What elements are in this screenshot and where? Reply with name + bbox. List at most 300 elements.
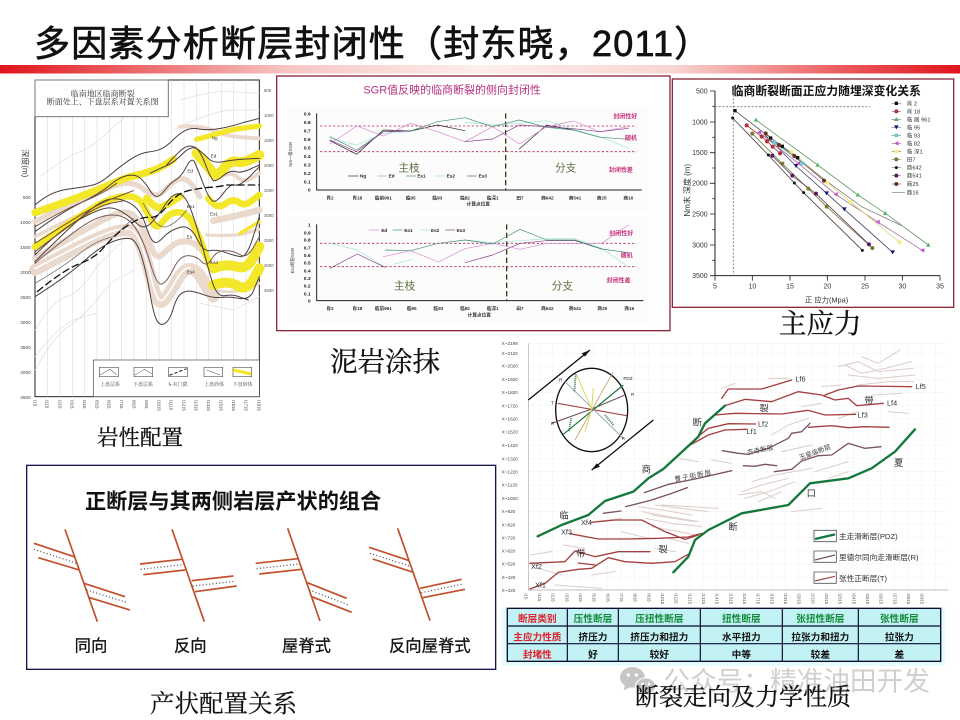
map x axis labels: I1315 xyxy=(701,593,706,605)
table stress row: 水平扭力 xyxy=(722,631,761,643)
left depth axis: 500 xyxy=(23,195,31,200)
lower line chart: 商642 xyxy=(541,305,554,312)
fault zone labels: 断 xyxy=(693,417,702,428)
lower line chart: 0.3 xyxy=(304,276,311,282)
upper line chart: 0.9 xyxy=(304,112,311,118)
fault zone labels: 裂 xyxy=(658,543,668,554)
diagram: roof ridge xyxy=(256,528,352,621)
white streaks inside tan bands xyxy=(35,229,190,300)
table: fault type properties xyxy=(502,607,945,697)
stratum labels: Es4 xyxy=(210,260,218,265)
upper line chart: 肖18 xyxy=(352,194,363,201)
map x axis labels: I115 xyxy=(537,593,542,602)
lower line chart: Es1 xyxy=(404,228,413,233)
fault horizon lines xyxy=(35,118,259,324)
stratum labels: Es4 xyxy=(187,269,195,274)
bottom axis labels: I1315 xyxy=(194,400,199,411)
upper line chart: 随机 xyxy=(625,134,637,142)
lower line chart: 0 xyxy=(308,299,311,305)
stratum labels: Ed xyxy=(211,153,217,158)
table column headers: 扭性断层 xyxy=(722,613,761,625)
right depth axis: 4000 xyxy=(264,263,274,268)
stratum labels: Es1 xyxy=(187,204,195,209)
lower line chart: Es2 xyxy=(431,228,440,233)
map y axis labels: X~1220 xyxy=(502,469,518,474)
fault name labels: Xf4 xyxy=(581,518,592,527)
lower line chart: 0.8 xyxy=(304,238,311,244)
fault zone labels xyxy=(559,395,904,559)
fault name labels: Xf1 xyxy=(535,580,546,589)
upper line chart: 0.8 xyxy=(304,120,311,126)
upper line chart: 商642 xyxy=(541,194,554,201)
bottom axis labels: I415 xyxy=(82,400,87,409)
diagram labels: 反向屋脊式 xyxy=(389,638,471,656)
legend box: 上盘层系 xyxy=(100,381,120,388)
map y axis labels: X~2199 xyxy=(502,341,518,346)
upper line chart: 0.3 xyxy=(304,162,311,168)
map y axis labels: X~1620 xyxy=(502,417,518,422)
fault zone labels: 商 xyxy=(642,464,651,475)
chart axes: 5 xyxy=(713,283,717,290)
table sealing row: 较好 xyxy=(650,649,669,661)
fault name labels: Lf4 xyxy=(887,399,897,408)
diagram: antithetic xyxy=(140,529,237,622)
table column headers xyxy=(574,613,919,625)
chart legend: 临 82 xyxy=(907,139,920,147)
chart legend: 肖 18 xyxy=(907,107,920,115)
chart axes: 500 xyxy=(696,88,708,95)
lower line chart: 商541 xyxy=(569,305,582,312)
header red gradient bar xyxy=(0,65,960,74)
upper line chart: 肖2 xyxy=(326,194,334,201)
stratum labels: Es1 xyxy=(210,211,218,216)
upper line chart: 计算点位置 xyxy=(467,201,490,208)
tan sandstone bands xyxy=(35,126,259,302)
caption: shale smear: 泥岩涂抹 xyxy=(330,346,440,377)
fault zone labels: 口 xyxy=(807,489,816,499)
map y axis labels: X~1520 xyxy=(502,430,518,435)
chart title: 临商断裂断面正应力随埋深变化关系 xyxy=(732,84,921,98)
map x axis labels: I2015 xyxy=(797,593,802,605)
chart axes: 10 xyxy=(748,283,756,290)
lower line chart: 计算点位置 xyxy=(468,312,491,319)
legend box: 下盘砂体 xyxy=(233,381,253,388)
map y axis labels: X~1720 xyxy=(502,403,518,408)
lower line chart: 0.9 xyxy=(304,230,311,236)
panel: normal fault bedding combinations xyxy=(27,465,496,669)
map axes xyxy=(528,343,948,590)
upper line chart: Ed xyxy=(389,174,395,179)
diagram labels xyxy=(75,638,471,656)
bottom axis labels: I215 xyxy=(57,400,62,409)
stress ellipse inset: R xyxy=(631,392,635,397)
legend box: 下盘层系 xyxy=(133,381,153,388)
panel title box xyxy=(35,80,168,117)
upper line chart: 主枝 xyxy=(398,162,420,175)
lower line chart: 随机 xyxy=(621,251,633,259)
faint contour lines xyxy=(35,91,259,370)
panel frame xyxy=(35,80,259,397)
lower line chart: 0.5 xyxy=(304,261,311,267)
right depth axis: 2500 xyxy=(264,188,274,193)
left depth axis: 2500 xyxy=(20,295,31,300)
table grid xyxy=(507,608,941,661)
lower line chart: 肖18 xyxy=(352,305,363,312)
table row headers: 断层类别 xyxy=(518,613,557,625)
panel frame xyxy=(27,465,496,669)
panel frame xyxy=(672,79,954,307)
right depth axis: 2000 xyxy=(264,163,274,168)
principal displacement zones xyxy=(538,406,915,572)
fault name labels: Xf3 xyxy=(561,527,572,536)
fault zone labels: 断 xyxy=(728,521,738,532)
lower line chart: 封闭性差 xyxy=(607,276,631,284)
stratum labels: Es xyxy=(187,234,193,239)
lower line chart: 临82 xyxy=(460,305,470,312)
stress ellipse inset xyxy=(528,350,653,470)
left depth axis: 1000 xyxy=(20,220,31,225)
stress ellipse inset: R xyxy=(551,421,555,426)
left depth axis: 2000 xyxy=(20,270,31,275)
map x axis labels: I315 xyxy=(564,593,569,602)
diagram: synthetic xyxy=(34,529,130,622)
chart axes: 30 xyxy=(898,283,906,290)
fault zone labels: 夏 xyxy=(894,458,904,468)
map y axis labels: X~1020 xyxy=(502,496,518,501)
chart axes: 1500 xyxy=(692,150,708,157)
left depth axis: 3000 xyxy=(20,320,31,325)
map y axis labels: X~920 xyxy=(502,509,516,514)
map x axis labels: I2915 xyxy=(920,593,925,605)
diagram labels: 反向 xyxy=(174,638,207,656)
watermark text: 公众号：精准油田开发 xyxy=(663,667,930,697)
legend box xyxy=(93,360,259,397)
upper line chart: 0.5 xyxy=(304,146,311,152)
upper line chart: Es3 xyxy=(479,174,487,179)
data markers xyxy=(731,109,931,254)
bottom axis labels xyxy=(32,400,261,411)
map y axis labels: X~320 xyxy=(502,588,516,593)
upper line chart: 封闭性差 xyxy=(609,166,633,174)
stratum labels xyxy=(187,135,218,274)
stress ellipse inset: T xyxy=(551,400,554,405)
legend box: S-Ｒ门限 xyxy=(168,381,188,388)
icon: wechat watermark xyxy=(620,667,656,694)
lower line chart xyxy=(289,223,643,319)
lower line chart: 田7 xyxy=(516,306,524,312)
map y axis labels: X~1820 xyxy=(502,390,518,395)
chart legend: 肖 2 xyxy=(907,99,917,107)
chart axes: 2500 xyxy=(692,212,708,219)
caption: principal stress: 主应力 xyxy=(779,308,862,339)
stress ellipse inset: PDZ xyxy=(623,376,633,381)
chart axes: 3000 xyxy=(692,242,708,249)
faint secondary faults xyxy=(530,350,915,588)
panel: normal stress vs depth chart xyxy=(672,79,954,307)
data series xyxy=(733,111,928,252)
map y axis labels: X~520 xyxy=(502,562,516,567)
lower line chart: 商16 xyxy=(624,305,635,312)
fault name labels: Lf1 xyxy=(747,427,757,436)
upper line chart: 商25 xyxy=(597,194,607,201)
map legend: 里德尔同向走滑断层(R) xyxy=(839,552,919,562)
upper line chart: Es1 xyxy=(417,174,426,179)
map x axis labels: I1715 xyxy=(756,593,761,605)
lower line chart: 1 xyxy=(308,223,311,229)
map y axis labels: X~2020 xyxy=(502,364,518,369)
legend box: 上盘砂体 xyxy=(204,381,224,388)
bottom axis labels: I915 xyxy=(144,400,149,409)
stratum labels: Ng xyxy=(212,135,218,140)
caption: fault strike and mechanics: 断裂走向及力学性质 xyxy=(635,684,851,711)
bottom axis labels: I1215 xyxy=(181,400,186,411)
lower line chart: 0.4 xyxy=(304,268,311,274)
named fault labels: 曹子街断层 xyxy=(674,467,713,484)
map x axis labels: I1515 xyxy=(728,593,733,605)
map x axis labels: I2715 xyxy=(892,593,897,605)
map x axis labels: I2215 xyxy=(824,593,829,605)
map y axis labels: X~620 xyxy=(502,549,516,554)
panel: SGR lateral sealing charts xyxy=(277,76,670,331)
fault zone labels: 临 xyxy=(559,509,569,520)
fault name labels xyxy=(531,375,926,589)
upper line chart: 商541 xyxy=(569,194,582,201)
section grid lines xyxy=(47,80,246,397)
bottom axis labels: I1815 xyxy=(256,400,261,411)
bottom axis labels: I615 xyxy=(107,400,112,409)
bottom axis labels: I815 xyxy=(131,400,136,409)
upper line chart: Ng xyxy=(360,174,366,179)
table stress row: 挤压力和扭力 xyxy=(630,631,688,643)
bottom axis labels: I115 xyxy=(45,400,50,409)
map x axis labels: I915 xyxy=(646,593,651,602)
right depth axis xyxy=(264,88,274,293)
lower line chart: 分支 xyxy=(552,280,573,292)
fault name labels: Lf5 xyxy=(916,382,926,391)
bottom axis labels: I1515 xyxy=(219,400,224,411)
upper line chart: 0.2 xyxy=(304,171,311,177)
map x axis labels xyxy=(523,593,925,605)
map y axis labels: X~1420 xyxy=(502,443,518,448)
fault zone labels: 带 xyxy=(576,549,585,559)
map y axis labels: X~1120 xyxy=(502,483,518,488)
lower line chart: 临前961 xyxy=(375,305,392,312)
lower line chart: Es1断裂SGR xyxy=(289,248,296,273)
lower line chart: 0.2 xyxy=(304,284,311,290)
panel: fault strike map xyxy=(502,341,948,605)
bottom axis labels: I315 xyxy=(70,400,75,409)
caption: bedding relation: 产状配置关系 xyxy=(150,690,297,718)
table stress row: 拉张力 xyxy=(885,631,914,643)
upper line chart: 临深1 xyxy=(487,194,499,201)
chart axes xyxy=(682,88,944,305)
left depth axis: 3500 xyxy=(20,345,31,350)
map y axis labels: X~2120 xyxy=(502,351,518,356)
Riedel synthetic strike-slip faults xyxy=(603,423,881,513)
left depth axis xyxy=(20,195,31,400)
map x axis labels: I615 xyxy=(605,593,610,602)
named fault labels xyxy=(674,442,832,484)
chart legend: 商16 xyxy=(907,188,919,196)
upper line chart: Nm一级SGR xyxy=(287,142,294,167)
lower line chart: 商25 xyxy=(597,305,608,312)
map x axis labels: I1215 xyxy=(687,593,692,605)
upper line chart: 临93 xyxy=(432,194,443,201)
right depth axis: 1000 xyxy=(264,113,274,118)
left depth axis: 4000 xyxy=(20,370,31,375)
title: 多因素分析断层封闭性（封东晓，2011） xyxy=(34,23,711,64)
upper line chart: 分支 xyxy=(555,163,577,175)
bottom axis labels: I1615 xyxy=(231,400,236,411)
diagram: reverse roof ridge xyxy=(369,528,465,621)
upper line chart: 临95 xyxy=(406,194,416,201)
map legend: 主走滑断层(PDZ) xyxy=(839,531,898,541)
map x axis labels: I1015 xyxy=(660,593,665,605)
table stress row xyxy=(579,631,914,643)
fault name labels: Xf2 xyxy=(531,562,542,571)
table sealing row: 差 xyxy=(895,649,905,661)
caption: lithology: 岩性配置 xyxy=(97,426,183,450)
right depth axis: 3500 xyxy=(264,238,274,243)
map y axis labels: X~720 xyxy=(502,535,516,540)
upper line chart: 商16 xyxy=(623,194,634,201)
lower line chart: 肖2 xyxy=(326,305,334,312)
left depth axis: 4500 xyxy=(20,395,31,400)
upper line chart: 0.1 xyxy=(304,179,311,185)
bottom axis labels: I1715 xyxy=(243,400,248,411)
table sealing row: 中等 xyxy=(732,649,751,661)
upper line chart: 封闭性好 xyxy=(613,113,637,121)
map legend: 张性正断层(T) xyxy=(839,573,888,583)
map x axis labels: I1415 xyxy=(715,593,720,605)
table background xyxy=(502,607,945,666)
panel frame xyxy=(277,76,670,331)
upper line chart: 0.6 xyxy=(304,137,311,143)
chart legend: 临 95 xyxy=(907,123,920,131)
map x axis labels: I215 xyxy=(551,593,556,602)
diagram labels: 屋脊式 xyxy=(282,638,331,656)
map x axis labels: I715 xyxy=(619,593,624,602)
panel heading: 正断层与其两侧岩层产状的组合 xyxy=(85,489,381,513)
table row headers: 封堵性 xyxy=(523,649,552,661)
map y axis labels: X~1320 xyxy=(502,456,518,461)
upper line chart: 0.4 xyxy=(304,154,311,160)
table column headers: 压扭性断层 xyxy=(635,613,684,625)
right depth axis: 4500 xyxy=(264,288,274,293)
map x axis labels: I1615 xyxy=(742,593,747,605)
chart legend: 临 深1 xyxy=(907,147,923,155)
diagram labels: 同向 xyxy=(75,638,107,656)
upper line chart: 0.7 xyxy=(304,129,311,135)
lower line chart: 0.1 xyxy=(304,291,311,297)
table sealing row: 好 xyxy=(588,649,598,661)
named fault labels: 齐寺断层 xyxy=(746,443,774,457)
chart axes: 3500 xyxy=(692,273,708,280)
table cells xyxy=(507,608,941,661)
map x axis labels: I2315 xyxy=(838,593,843,605)
upper line chart: Es2 xyxy=(447,174,455,179)
bottom axis labels: I715 xyxy=(119,400,124,409)
map x axis labels: I815 xyxy=(633,593,638,602)
bottom axis labels: I1115 xyxy=(169,400,174,411)
upper line chart: 0 xyxy=(308,188,311,194)
chart background panes xyxy=(287,106,648,322)
stress ellipse inset: R xyxy=(622,436,626,441)
right depth axis: 500 xyxy=(264,88,272,93)
fault name labels: Lf6 xyxy=(795,375,806,384)
map x axis labels: I2615 xyxy=(879,593,884,605)
chart legend: 商642 xyxy=(907,164,922,172)
table stress row: 拉张力和扭力 xyxy=(791,631,849,643)
tensional normal faults xyxy=(530,380,912,589)
table column headers: 张性断层 xyxy=(880,613,919,625)
map x axis labels: I2815 xyxy=(906,593,911,605)
right depth axis: 3000 xyxy=(264,213,274,218)
chart axes: 25 xyxy=(861,283,869,290)
fault zone labels: 裂 xyxy=(759,403,769,414)
map legend xyxy=(814,530,919,583)
table sealing row: 较差 xyxy=(811,649,830,661)
upper line chart: 临前961 xyxy=(375,194,392,201)
bottom axis labels: I515 xyxy=(94,400,99,409)
lower line chart: 0.7 xyxy=(304,245,311,251)
chart axes: 2000 xyxy=(692,181,708,188)
map x axis labels: I2415 xyxy=(851,593,856,605)
map y axis labels xyxy=(502,341,518,593)
depth axis label: 深度(m) xyxy=(21,149,31,178)
upper line chart: 临82 xyxy=(460,194,470,201)
fault zone labels: 带 xyxy=(864,395,874,405)
chart axes: 35 xyxy=(936,283,944,290)
bottom axis labels: I1015 xyxy=(156,400,161,411)
chart legend xyxy=(892,99,931,196)
stratum labels: Ed xyxy=(187,169,193,174)
panel title box: 断面处上、下盘层系对置关系图 xyxy=(47,97,159,107)
map x axis labels: I2515 xyxy=(865,593,870,605)
lower line chart: 临93 xyxy=(433,305,444,312)
chart title: SGR值反映的临商断裂的侧向封闭性 xyxy=(363,83,541,97)
lower line chart: 临95 xyxy=(407,305,417,312)
chart axes: 20 xyxy=(823,283,831,290)
map y axis labels: X~820 xyxy=(502,522,516,527)
bottom axis labels: I1415 xyxy=(206,400,211,411)
map grid lines xyxy=(528,343,948,590)
upper line chart xyxy=(287,112,642,208)
named fault labels: 玉皇庙断层 xyxy=(798,442,832,462)
chart legend: 商541 xyxy=(907,172,922,180)
chart legend: 临 93 xyxy=(907,131,920,139)
lower line chart: 临深1 xyxy=(487,305,499,312)
bottom axis labels: I15 xyxy=(32,400,37,407)
map x axis labels: I1815 xyxy=(769,593,774,605)
panel: lithology juxtaposition section xyxy=(20,80,274,411)
table row headers: 主应力性质 xyxy=(513,631,562,643)
lower line chart: 封闭性好 xyxy=(609,230,633,238)
stress ellipse inset: R xyxy=(559,378,563,383)
left depth axis: 1500 xyxy=(20,245,31,250)
right depth axis: 1500 xyxy=(264,138,274,143)
chart legend: 商25 xyxy=(907,180,919,188)
lower line chart: Ed xyxy=(381,228,387,233)
map y axis labels: X~1920 xyxy=(502,377,518,382)
map x axis labels: I15 xyxy=(523,593,528,600)
chart axes: 15 xyxy=(786,283,794,290)
chart axes: Nm末 深度 (m) xyxy=(682,164,692,217)
map y axis labels: X~420 xyxy=(502,575,516,580)
table column headers: 压性断层 xyxy=(574,613,613,625)
map x axis labels: I2115 xyxy=(810,593,815,604)
chart axes: 正 应力(Mpa) xyxy=(805,296,848,305)
